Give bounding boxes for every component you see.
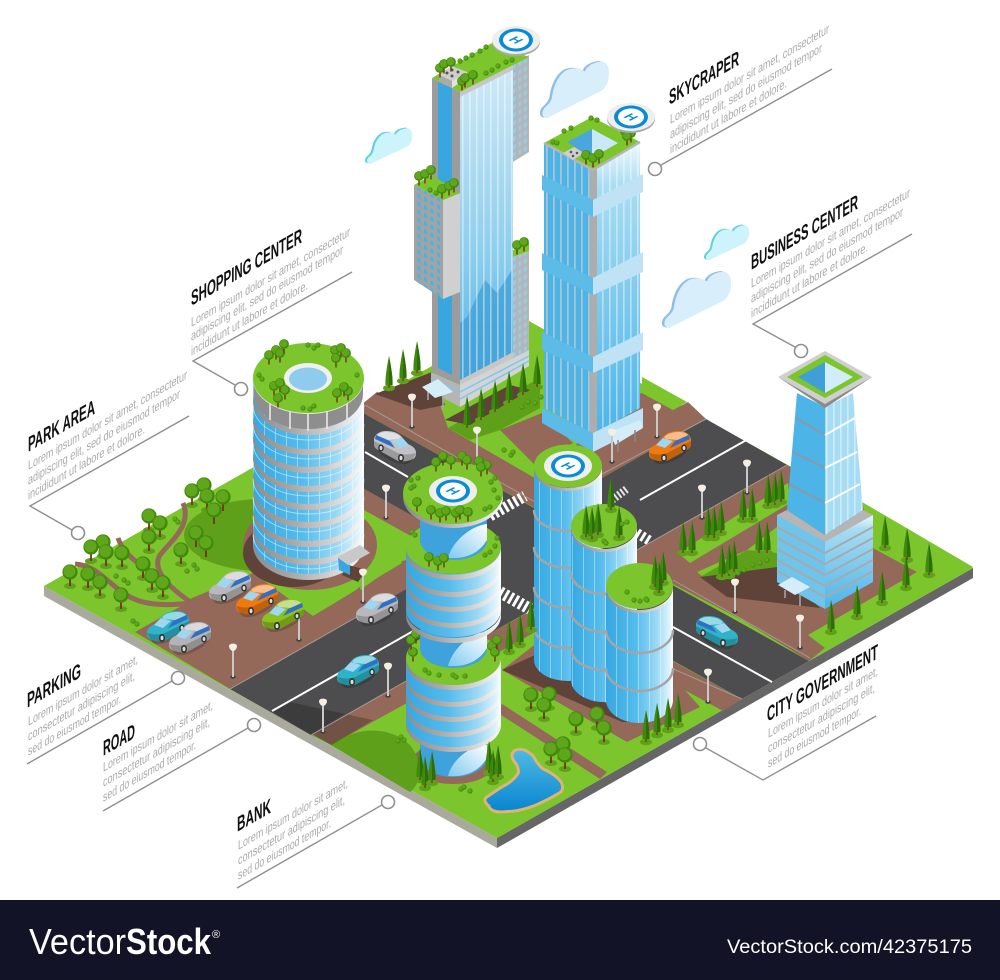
entrance canopy xyxy=(337,545,370,582)
body text: incididunt ut labore et dolore. xyxy=(191,277,308,359)
lower rings section xyxy=(406,631,501,752)
callout: parking xyxy=(27,651,184,764)
upper window block xyxy=(513,55,529,162)
podium xyxy=(777,510,873,609)
body text: Lorem ipsum dolor sit amet, xyxy=(238,775,348,853)
street lamps xyxy=(229,394,804,734)
cloud: small left teal xyxy=(365,128,412,164)
lower window block xyxy=(513,251,529,358)
city platform xyxy=(44,316,973,848)
cloud: large right xyxy=(662,271,731,328)
side annex block xyxy=(414,175,460,299)
logo: Vector xyxy=(29,921,126,962)
silver floor rings xyxy=(253,394,364,580)
roof garden xyxy=(544,117,640,170)
entrance canopy xyxy=(778,577,810,606)
image id: VectorStock.com/42375175 xyxy=(727,937,972,958)
hotel: cylinder cluster xyxy=(534,444,673,723)
cylinder two trees xyxy=(580,478,630,546)
body text: adipiscing elit, sed do eiusmod tempor xyxy=(191,241,343,344)
top neck xyxy=(420,510,487,560)
roof railing xyxy=(254,378,363,431)
body text: sed do eiusmod tempor. xyxy=(103,736,196,805)
helipad: H xyxy=(505,35,527,45)
cloud: small right teal xyxy=(704,225,749,260)
platform sides xyxy=(44,568,973,848)
logo xyxy=(29,921,220,962)
garden trees xyxy=(523,686,612,772)
lower block roof trees xyxy=(512,237,529,257)
roof trees xyxy=(550,115,636,168)
mullions xyxy=(253,378,364,578)
shaft right xyxy=(825,393,863,535)
callout: road xyxy=(103,697,260,811)
glass facade xyxy=(460,70,513,380)
road markings xyxy=(272,438,772,711)
entrance canopy xyxy=(422,379,453,410)
skylight pyramid xyxy=(567,129,618,158)
city government tower xyxy=(777,351,873,609)
body text: sed do eiusmod tempor. xyxy=(768,702,861,771)
cylinder three xyxy=(606,563,673,723)
corner column xyxy=(590,168,597,436)
roof garden xyxy=(432,43,529,92)
middle neck xyxy=(420,615,487,668)
heading: SKYCRAPER xyxy=(669,45,739,110)
body text: Lorem ipsum dolor sit amet, consectetur xyxy=(191,223,350,330)
park trees xyxy=(62,477,231,627)
shaft left xyxy=(787,393,825,535)
callout: business center xyxy=(751,184,912,358)
body text: Lorem ipsum dolor sit amet, xyxy=(768,663,878,741)
entrance canopy xyxy=(610,420,643,452)
logo: Stock xyxy=(126,921,212,962)
garden cypress trees xyxy=(414,598,684,791)
upper rings section xyxy=(406,520,501,643)
floor bands xyxy=(542,174,643,452)
callout: bank xyxy=(237,775,394,888)
road: main lower-left to upper-right xyxy=(230,419,787,735)
tower right face xyxy=(460,63,513,387)
top disc xyxy=(403,462,503,528)
leader line xyxy=(30,416,189,540)
cars xyxy=(147,431,738,693)
leader line xyxy=(27,672,184,764)
body text: incididunt ut labore et dolore. xyxy=(670,75,787,157)
road: upper-left to lower-right xyxy=(289,409,809,699)
ground surface xyxy=(44,316,973,838)
top helipad: H xyxy=(442,486,464,496)
shopping center xyxy=(253,339,370,582)
body text: Lorem ipsum dolor sit amet, xyxy=(28,651,138,729)
callout: skyscraper xyxy=(648,20,832,175)
roof edge xyxy=(544,142,640,170)
footer bar xyxy=(0,900,1000,980)
middle section trees xyxy=(409,529,500,570)
body text: Lorem ipsum dolor sit amet, consectetur xyxy=(751,184,910,291)
body text: adipiscing elit, sed do eiusmod tempor xyxy=(751,203,903,306)
leader line xyxy=(753,234,912,358)
road edge shadow xyxy=(273,702,345,735)
body text: Lorem ipsum dolor sit amet, consectetur xyxy=(28,366,187,473)
helipad xyxy=(492,26,540,56)
right face xyxy=(596,143,640,433)
heading: BANK xyxy=(237,793,271,837)
back row cypress trees xyxy=(383,341,423,391)
front garden xyxy=(395,598,684,810)
logo: ® xyxy=(212,929,220,941)
cylinder three trees xyxy=(624,551,669,604)
body text: Lorem ipsum dolor sit amet, xyxy=(103,697,213,775)
top helipad xyxy=(429,476,477,506)
leader line xyxy=(193,272,352,396)
callout: shopping center xyxy=(191,223,352,396)
leader line xyxy=(648,69,832,176)
leader line xyxy=(237,796,394,888)
annex trees xyxy=(414,165,459,198)
heading: PARK AREA xyxy=(28,394,95,457)
heading: PARKING xyxy=(27,657,81,713)
callout: city government xyxy=(694,639,878,780)
glass cylinder xyxy=(253,378,364,578)
cylinder one xyxy=(534,444,602,681)
ground neck xyxy=(420,725,487,777)
helipad xyxy=(607,103,655,133)
helipad: H xyxy=(620,112,642,122)
roof trees xyxy=(256,339,360,412)
cloud: large upper xyxy=(540,61,609,118)
cylinder one: H xyxy=(557,461,579,471)
road-side trees, shrubs xyxy=(461,355,935,635)
tower left face xyxy=(432,78,460,385)
left face xyxy=(544,143,592,433)
lawn patches and shadows xyxy=(273,372,973,792)
skyscraper xyxy=(414,26,540,410)
callout: park area xyxy=(28,366,189,540)
roof garden xyxy=(253,343,364,414)
business tower with stripes xyxy=(542,103,655,452)
body text: consectetur adipiscing elit, xyxy=(103,713,210,790)
lower section shrubs xyxy=(406,629,502,680)
body text: adipiscing elit, sed do eiusmod tempor xyxy=(670,39,822,142)
body text: sed do eiusmod tempor. xyxy=(28,690,121,759)
garden shrubs xyxy=(395,734,473,794)
body text: consectetur adipiscing elit, xyxy=(768,679,875,756)
heading: ROAD xyxy=(103,718,135,761)
leader line xyxy=(103,718,260,811)
pond xyxy=(486,751,561,810)
park shade and paths xyxy=(75,499,340,605)
heading: CITY GOVERNMENT xyxy=(767,639,878,727)
body text: adipiscing elit, sed do eiusmod tempor xyxy=(28,385,180,488)
top disc trees xyxy=(408,451,501,522)
roof slab xyxy=(778,351,872,408)
road edge lines xyxy=(230,405,810,735)
body text: incididunt ut labore et dolore. xyxy=(28,421,145,503)
bank: stacked tower xyxy=(403,451,503,777)
body text: consectetur adipiscing elit, xyxy=(238,791,345,868)
AC unit xyxy=(563,147,584,160)
cylinder two xyxy=(571,504,637,702)
heading: BUSINESS CENTER xyxy=(751,189,858,275)
roof AC unit xyxy=(439,66,467,88)
body text: sed do eiusmod tempor. xyxy=(238,814,331,883)
pavements xyxy=(135,378,917,784)
body text: consectetur adipiscing elit, xyxy=(28,667,135,744)
tower base xyxy=(431,350,529,407)
body text: incididunt ut labore et dolore. xyxy=(751,239,868,321)
heading: SHOPPING CENTER xyxy=(191,223,302,311)
leader line xyxy=(694,716,876,780)
roof pool xyxy=(284,363,332,393)
roof trees xyxy=(435,44,515,90)
